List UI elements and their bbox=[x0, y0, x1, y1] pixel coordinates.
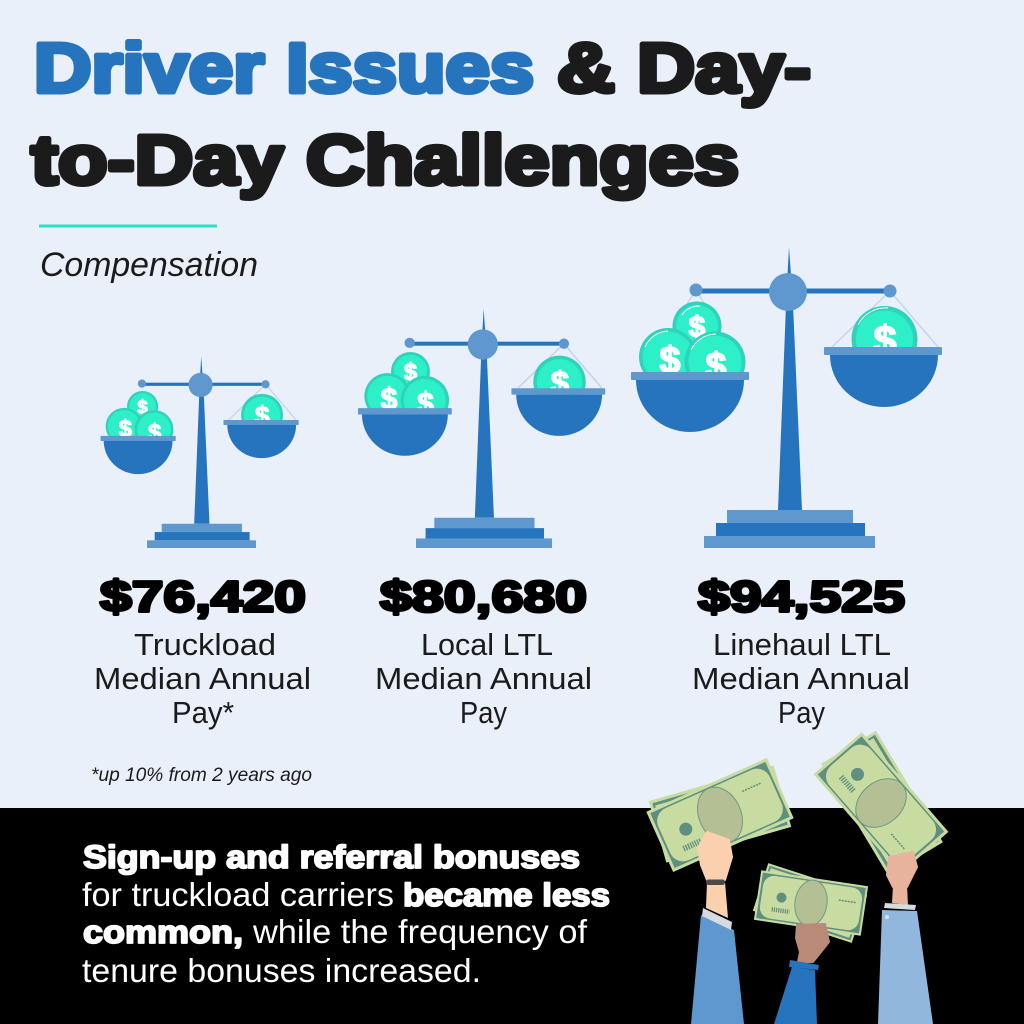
callout: bonuses: Sign-up and referral bonuses bbox=[83, 839, 580, 875]
medium scale: local LTL: $ bbox=[417, 388, 434, 421]
section heading: compensation: Compensation bbox=[40, 246, 258, 284]
callout: bonuses: common, bbox=[83, 914, 243, 950]
callout: bonuses: for truckload carriers bbox=[82, 876, 394, 913]
callout: bonuses: tenure bonuses increased. bbox=[82, 952, 481, 989]
bottom black band bbox=[0, 808, 1024, 1024]
large scale: linehaul LTL: $ bbox=[689, 311, 706, 344]
stat: local LTL: Pay bbox=[460, 695, 507, 730]
accent line bbox=[39, 224, 217, 228]
small scale: truckload: $ bbox=[255, 401, 270, 431]
callout: bonuses: while the frequency of bbox=[252, 913, 588, 950]
stat: local LTL: $80,680 bbox=[380, 572, 587, 622]
callout: bonuses: became less bbox=[403, 877, 610, 913]
stat: truckload: $76,420 bbox=[100, 572, 306, 622]
small scale: truckload bbox=[101, 356, 299, 548]
stat: truckload: Truckload bbox=[134, 627, 276, 662]
large scale: linehaul LTL bbox=[631, 247, 942, 548]
stat: linehaul LTL: $94,525 bbox=[698, 572, 905, 622]
small scale: truckload: $ bbox=[148, 419, 162, 446]
stat: local LTL bbox=[375, 572, 592, 730]
medium scale: local LTL: $ bbox=[381, 383, 398, 416]
title bbox=[31, 29, 811, 199]
medium scale: local LTL: $ bbox=[551, 366, 570, 403]
illustration: right hand with cash bbox=[814, 731, 948, 1024]
title: to-Day Challenges bbox=[31, 121, 739, 199]
illustration: center hand with cash bbox=[753, 863, 868, 1024]
stat: linehaul LTL bbox=[692, 572, 910, 730]
large scale: linehaul LTL: $ bbox=[873, 317, 897, 364]
stat: local LTL: Local LTL bbox=[421, 627, 553, 662]
medium scale: local LTL: $ bbox=[404, 359, 417, 386]
large scale: linehaul LTL: $ bbox=[659, 340, 681, 382]
stat: local LTL: Median Annual bbox=[375, 661, 592, 696]
small scale: truckload: $ bbox=[119, 416, 133, 443]
stat: linehaul LTL: Pay bbox=[778, 695, 825, 730]
stat: linehaul LTL: Median Annual bbox=[692, 661, 910, 696]
stat: linehaul LTL: Linehaul LTL bbox=[713, 627, 891, 662]
title: Driver Issues bbox=[34, 29, 534, 107]
medium scale: local LTL bbox=[358, 309, 605, 548]
stat: truckload: Median Annual bbox=[94, 661, 311, 696]
stat: truckload bbox=[94, 572, 311, 730]
footnote: *up 10% from 2 years ago bbox=[91, 765, 312, 786]
large scale: linehaul LTL: $ bbox=[705, 346, 727, 388]
illustration: left hand with cash bbox=[646, 758, 794, 1024]
stat: truckload: Pay* bbox=[172, 695, 234, 730]
title: & Day- bbox=[557, 29, 811, 107]
callout: bonuses bbox=[82, 839, 610, 989]
small scale: truckload: $ bbox=[137, 398, 148, 419]
